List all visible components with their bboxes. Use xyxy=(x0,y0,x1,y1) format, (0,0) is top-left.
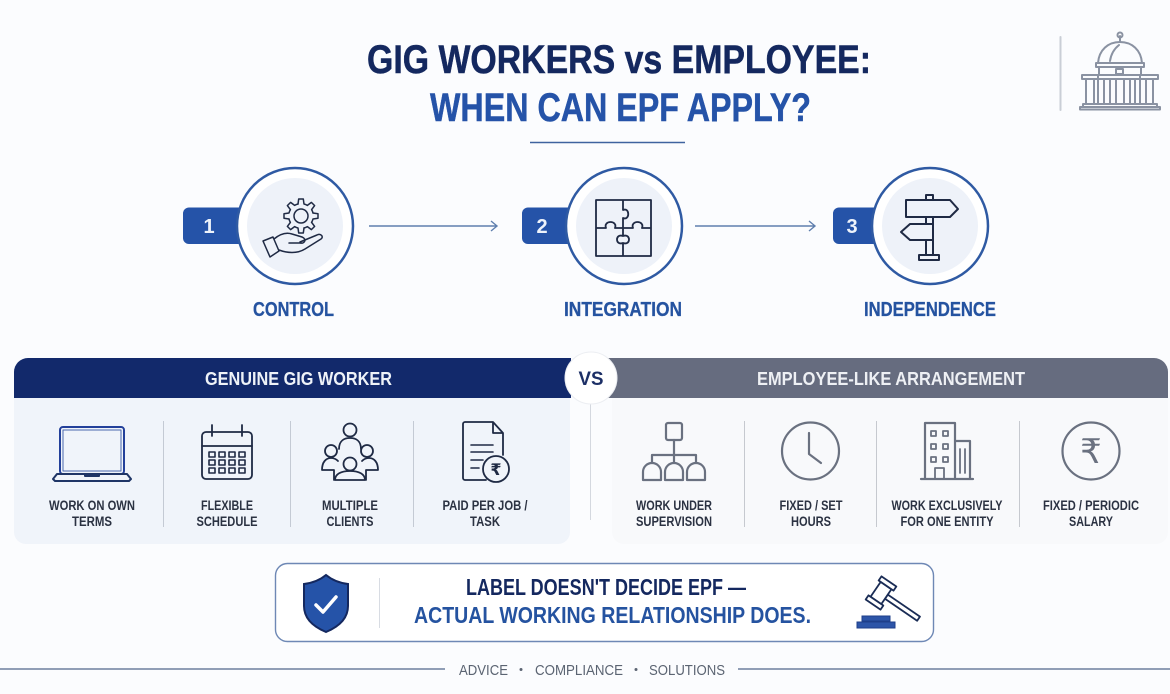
item: work exclusively for one entity xyxy=(892,423,1002,529)
panel body xyxy=(14,380,570,544)
text: WORK UNDER xyxy=(636,498,712,513)
panel: genuine gig worker xyxy=(14,358,571,544)
text xyxy=(49,498,135,529)
icon: government building xyxy=(1060,32,1160,110)
step 3: independence xyxy=(833,168,996,321)
title xyxy=(367,38,871,130)
callout text: ACTUAL WORKING RELATIONSHIP DOES. xyxy=(414,602,811,628)
text xyxy=(780,498,843,529)
icon: clock xyxy=(782,422,839,480)
item: paid per job or task xyxy=(442,422,528,529)
text: MULTIPLE xyxy=(322,498,378,513)
label: independence: INDEPENDENCE xyxy=(864,299,996,321)
badge 2: 2 xyxy=(536,216,548,238)
text: WORK EXCLUSIVELY xyxy=(892,498,1002,513)
vs badge: VS xyxy=(578,369,604,390)
icon: puzzle xyxy=(596,200,651,256)
text: SALARY xyxy=(1069,514,1113,529)
item: work under supervision xyxy=(636,423,712,529)
text: HOURS xyxy=(791,514,831,529)
text: PAID PER JOB / xyxy=(442,498,528,513)
panel header: GENUINE GIG WORKER xyxy=(205,368,392,389)
panel header: EMPLOYEE-LIKE ARRANGEMENT xyxy=(757,368,1026,389)
icon: office building xyxy=(921,423,973,479)
icon: gavel xyxy=(857,576,926,630)
text xyxy=(892,498,1002,529)
text xyxy=(322,498,378,529)
badge 3: 3 xyxy=(846,216,858,238)
step 2: integration xyxy=(522,168,682,321)
icon: people group xyxy=(322,424,378,480)
footer: SOLUTIONS xyxy=(649,663,725,679)
title: WHEN CAN EPF APPLY? xyxy=(430,86,811,130)
circle 1 xyxy=(237,168,353,284)
item: work on own terms xyxy=(49,427,135,529)
item: fixed or periodic salary xyxy=(1043,422,1139,529)
icon: hand with gear xyxy=(263,199,322,257)
panel header xyxy=(608,358,1168,398)
icon: shield with check xyxy=(304,575,348,632)
arrow 2 to 3 xyxy=(695,221,815,231)
badge 1: 1 xyxy=(203,216,215,238)
text xyxy=(1043,498,1139,529)
step 1: control xyxy=(183,168,353,321)
panel: employee-like arrangement xyxy=(608,358,1168,544)
icon: laptop xyxy=(53,427,131,481)
circle 3 xyxy=(872,168,988,284)
item: fixed or set hours xyxy=(780,422,843,529)
text: FIXED / PERIODIC xyxy=(1043,498,1139,513)
callout text xyxy=(414,574,811,628)
text: FOR ONE ENTITY xyxy=(900,514,994,529)
text xyxy=(196,498,258,529)
panel header xyxy=(14,358,571,398)
vs badge xyxy=(565,352,617,520)
label: control: CONTROL xyxy=(253,299,334,321)
panel body xyxy=(612,380,1168,544)
badge 3 xyxy=(833,208,903,244)
icon: calendar xyxy=(202,425,252,479)
badge 2 xyxy=(522,208,592,244)
footer: COMPLIANCE xyxy=(535,663,623,679)
title: GIG WORKERS vs EMPLOYEE: xyxy=(367,38,871,82)
text xyxy=(442,498,528,529)
arrow 1 to 2 xyxy=(369,221,497,231)
callout xyxy=(276,564,934,642)
item: multiple clients xyxy=(322,424,378,529)
icon: org chart xyxy=(643,423,705,480)
item: flexible schedule xyxy=(196,425,258,529)
text: SCHEDULE xyxy=(196,514,258,529)
text xyxy=(636,498,712,529)
callout text: LABEL DOESN'T DECIDE EPF — xyxy=(466,574,746,600)
circle 2 xyxy=(566,168,682,284)
badge 1 xyxy=(183,208,253,244)
footer: ADVICE xyxy=(459,663,508,679)
text: FIXED / SET xyxy=(780,498,843,513)
label: integration: INTEGRATION xyxy=(564,299,682,321)
text: SUPERVISION xyxy=(636,514,712,529)
text: CLIENTS xyxy=(326,514,374,529)
text: FLEXIBLE xyxy=(201,498,253,513)
text: TERMS xyxy=(72,514,112,529)
icon: rupee coin: ₹ xyxy=(1080,432,1102,472)
icon: invoice with rupee: ₹ xyxy=(490,460,502,479)
text: TASK xyxy=(470,514,500,529)
text: WORK ON OWN xyxy=(49,498,135,513)
footer xyxy=(0,663,1170,679)
icon: signpost xyxy=(901,195,958,260)
